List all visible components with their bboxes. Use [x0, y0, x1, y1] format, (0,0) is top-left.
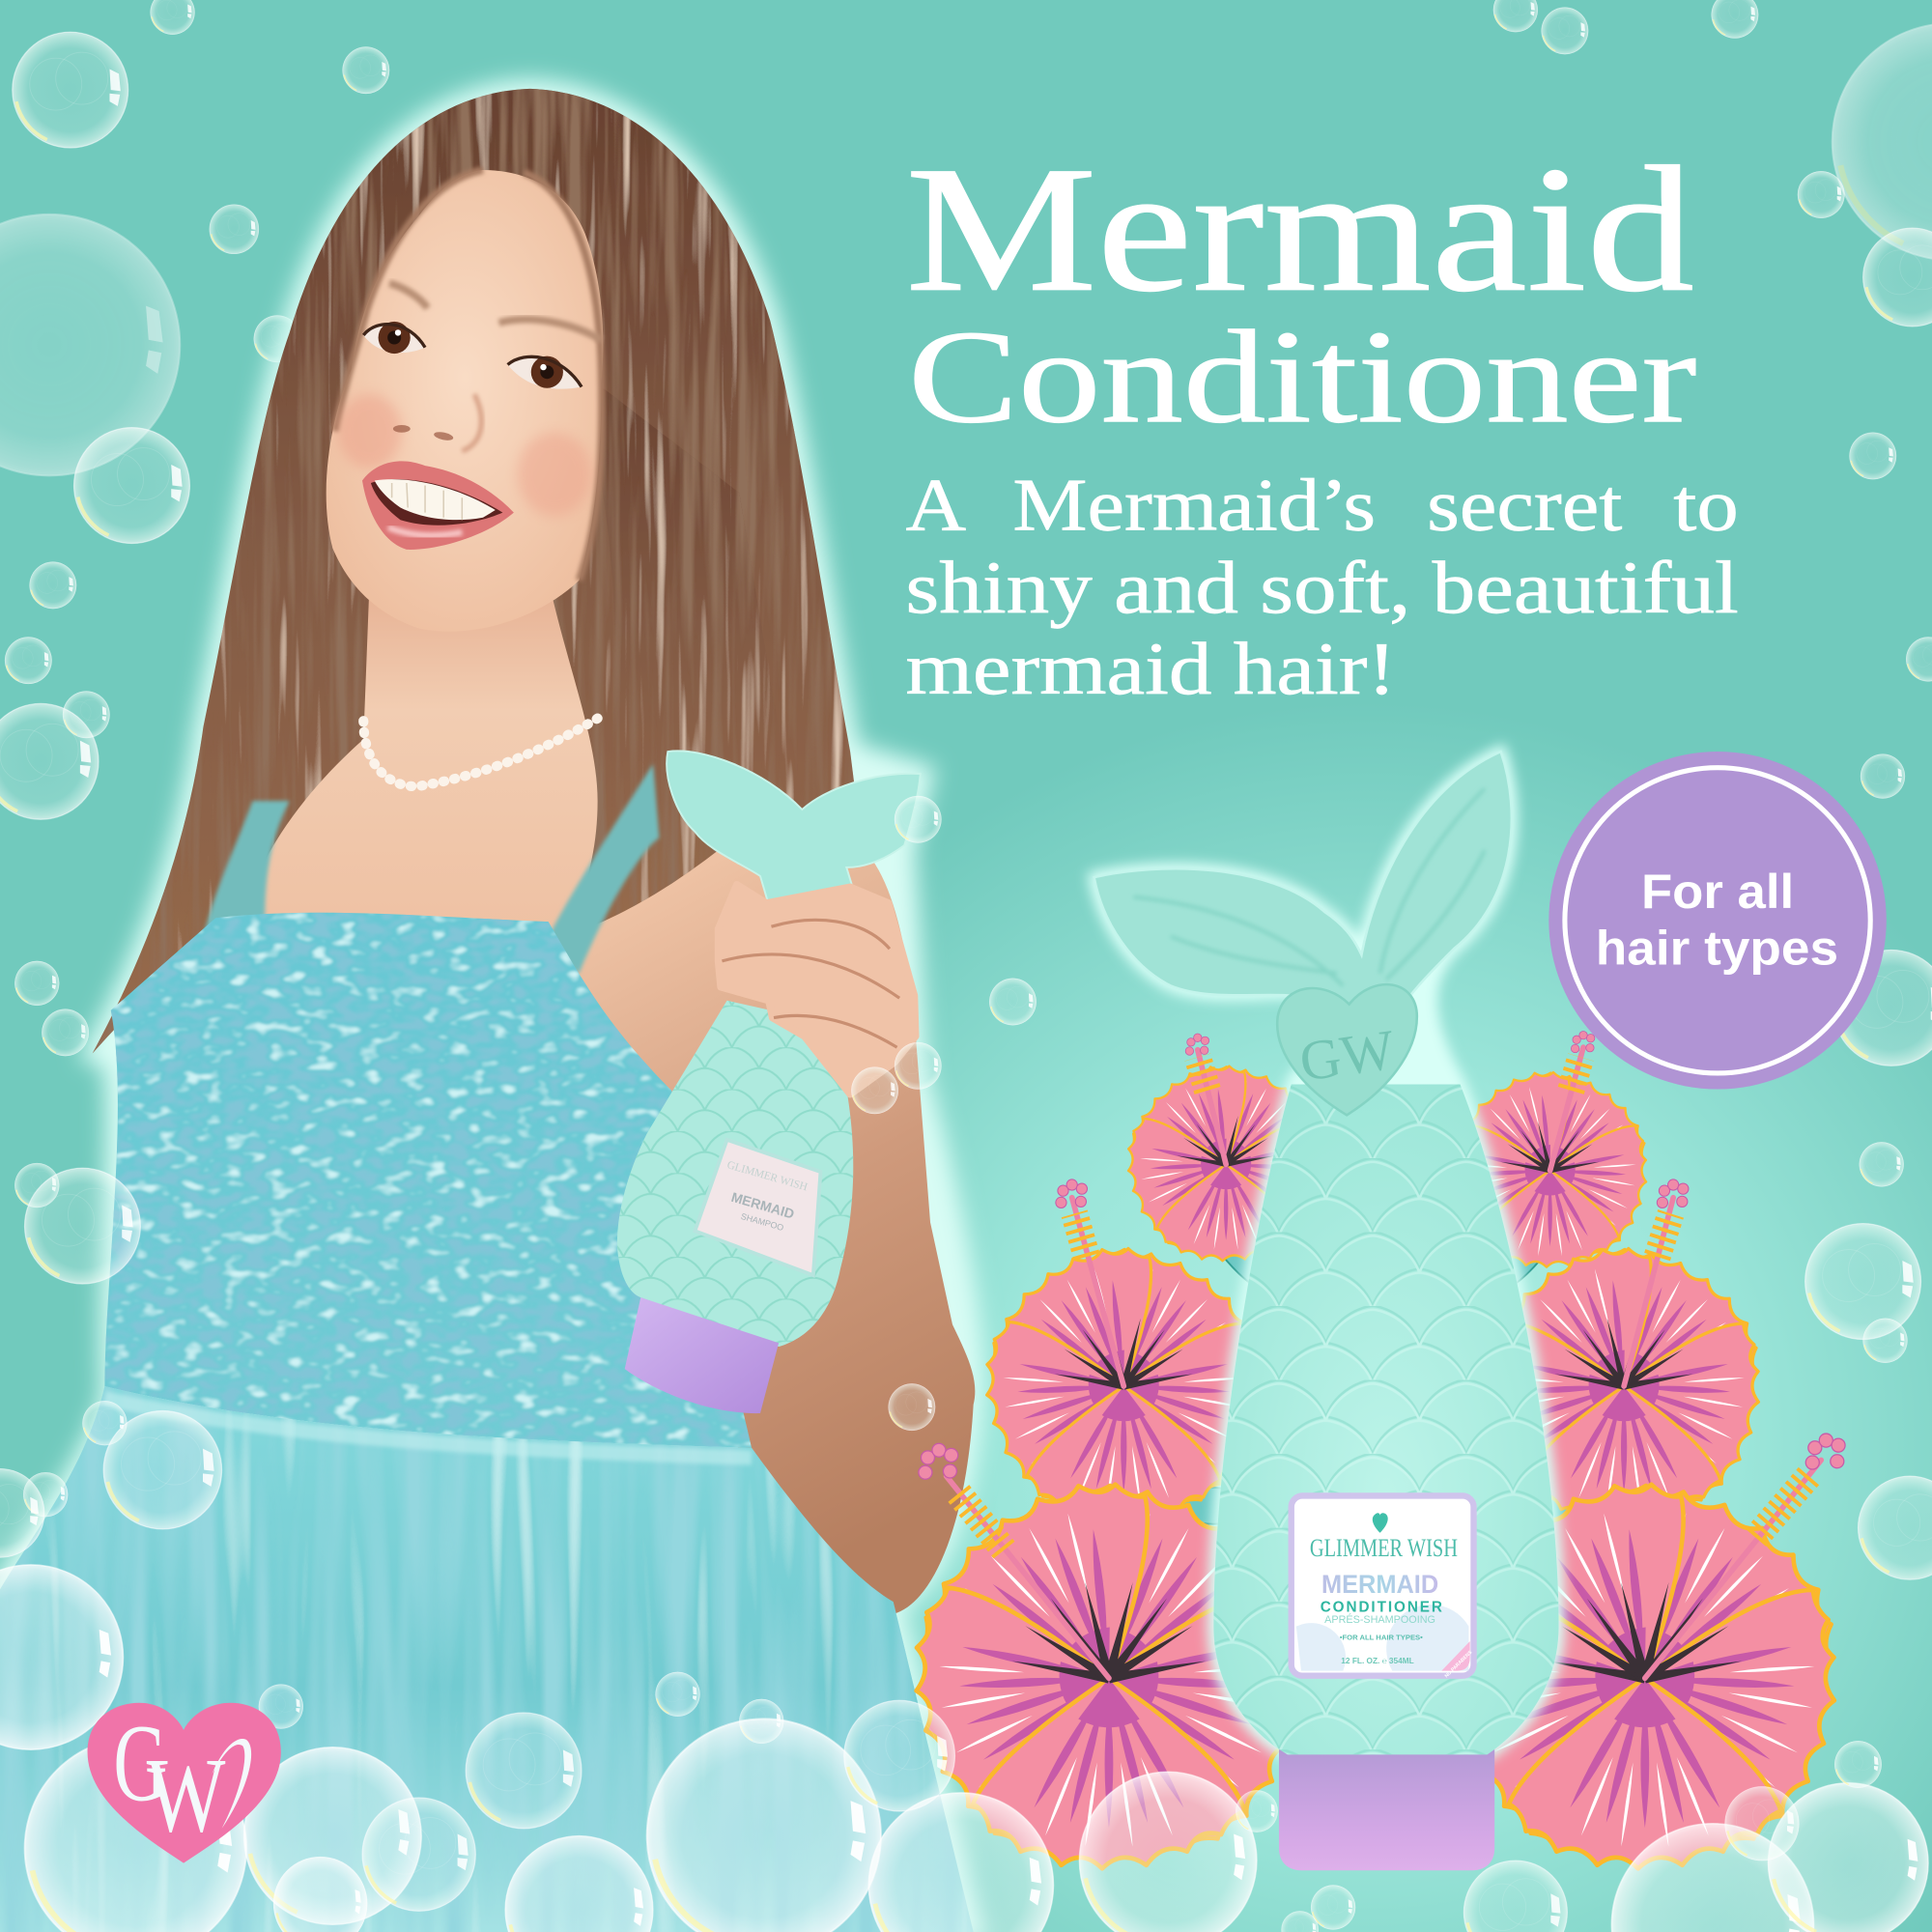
hair — [93, 89, 863, 1054]
bottle body — [1213, 1084, 1559, 1754]
neck and chest — [234, 579, 598, 955]
subtitle: A Mermaid’s secret to — [906, 463, 1739, 546]
girl holding small bottle — [0, 89, 975, 1932]
leaves — [1146, 1242, 1602, 1524]
small bottle cap — [625, 1297, 779, 1413]
bottle scales — [1208, 1084, 1565, 1756]
brand heart logo: G — [113, 1702, 167, 1825]
brand heart logo: W — [147, 1736, 226, 1854]
title second line: Conditioner — [908, 302, 1696, 450]
heart with monogram: GW — [1296, 1018, 1399, 1094]
bottle label: •FOR ALL HAIR TYPES• — [1340, 1634, 1423, 1642]
ruffled bodice — [104, 913, 752, 1448]
small bottle tail — [667, 751, 921, 918]
small bottle label: SHAMPOO — [740, 1211, 784, 1233]
face — [327, 170, 603, 632]
pearl necklace — [363, 719, 598, 786]
badge: for all hair types: For all — [1641, 865, 1794, 919]
bottle label — [1292, 1495, 1474, 1679]
subtitle — [906, 463, 1739, 710]
small bottle — [604, 751, 921, 1413]
big conditioner bottle — [1094, 752, 1565, 1870]
badge: for all hair types — [1548, 752, 1887, 1090]
bottle label: GLIMMER WISH — [1310, 1533, 1458, 1562]
mouth — [362, 461, 514, 550]
small bottle label: MERMAID — [729, 1189, 796, 1222]
bottle label: APRÉS-SHAMPOOING — [1324, 1613, 1435, 1626]
small bottle label — [695, 1140, 820, 1275]
subtitle: shiny and soft, beautiful — [906, 546, 1739, 629]
small bottle label: GLIMMER WISH — [725, 1159, 809, 1193]
bottle label: MERMAID — [1321, 1570, 1438, 1599]
hibiscus flowers — [886, 1031, 1868, 1868]
hair lock over shoulder — [573, 370, 788, 933]
tulle skirt — [0, 1386, 974, 1932]
bottle label: CONDITIONER — [1321, 1599, 1442, 1615]
bottle glow — [1094, 752, 1559, 1754]
girl halo glow — [0, 89, 974, 1932]
dress straps — [203, 764, 659, 974]
bottle label: NO PARABENS — [1444, 1649, 1474, 1679]
brand heart logo — [88, 1702, 281, 1863]
title: Mermaid — [906, 130, 1694, 329]
heart with monogram — [1277, 984, 1417, 1115]
hand — [719, 885, 916, 1094]
mermaid tail — [1094, 752, 1512, 1023]
arm and shoulder — [542, 825, 975, 1614]
bottle label: 12 FL. OZ. ℮ 354ML — [1341, 1656, 1414, 1665]
bottle cap — [1279, 1749, 1494, 1870]
subtitle: mermaid hair! — [906, 627, 1396, 710]
pistils — [947, 1047, 1821, 1678]
badge: for all hair types: hair types — [1596, 922, 1838, 976]
foreground bubbles — [0, 796, 1928, 1932]
